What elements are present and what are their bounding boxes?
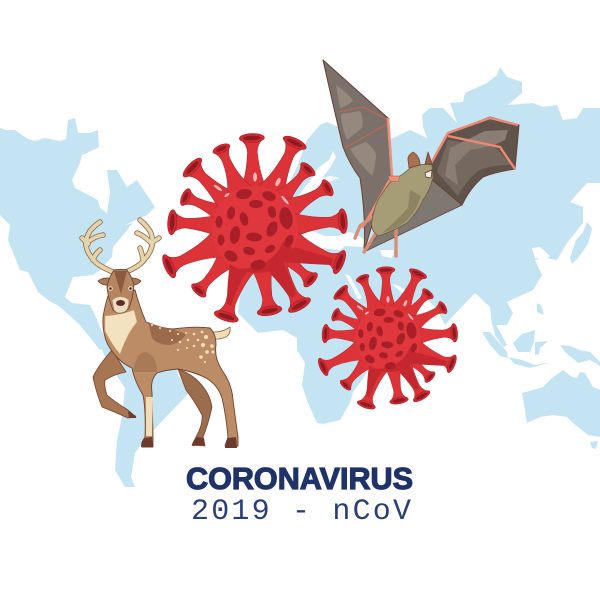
- bat: right wing bones: [430, 118, 518, 169]
- deer: shoulder shade: [133, 352, 157, 372]
- deer: spots: [151, 324, 214, 363]
- map: Red Sea: [345, 274, 362, 299]
- deer: right antler: [126, 220, 159, 272]
- deer: body: [103, 290, 238, 447]
- bat: left wing bones: [338, 107, 388, 148]
- deer: cream front shin: [146, 397, 153, 436]
- map: Mediterranean: [298, 230, 366, 250]
- map: Black Sea: [380, 250, 394, 258]
- map: Japan and Kuril islands: [570, 222, 592, 264]
- map: Malay peninsula: [491, 318, 507, 347]
- map: Baltic and Scandinavia inlet: [298, 151, 340, 197]
- bat: right wing lower membrane: [364, 172, 462, 252]
- bat: mouth: [425, 170, 432, 178]
- deer: cream chest bib: [105, 310, 137, 354]
- bat: hand: [388, 176, 400, 182]
- map: Yellow Sea: [532, 247, 550, 260]
- map: Borneo: [513, 330, 535, 352]
- deer: nose: [116, 300, 125, 306]
- deer: forehead stripe: [114, 271, 127, 294]
- world map: [0, 67, 600, 487]
- deer: ears: [98, 278, 141, 285]
- map: Java and lesser islands: [508, 357, 552, 368]
- bat: body: [372, 164, 433, 236]
- map: South America: [98, 335, 190, 487]
- title: CORONAVIRUS: CORONAVIRUS: [186, 462, 413, 496]
- bat: right wing: [430, 117, 519, 205]
- map: New Guinea: [560, 345, 600, 366]
- map: Eurasia and Africa: [238, 67, 600, 424]
- bat: far ear: [425, 152, 432, 164]
- bat: near ear: [408, 152, 420, 168]
- bat: left arm bone: [362, 118, 392, 228]
- bat: right wing light panel: [437, 140, 512, 196]
- bat: left wing light patches: [336, 85, 376, 176]
- deer: eyes: [109, 287, 132, 290]
- map: Philippines: [537, 303, 544, 315]
- deer: far back leg: [178, 369, 212, 446]
- map: North and Central America: [0, 118, 155, 350]
- deer: left antler: [82, 222, 113, 272]
- virus: large red coronavirus: [157, 131, 351, 327]
- bat: body shade: [382, 190, 421, 233]
- deer: [82, 220, 238, 448]
- map: Celebes: [535, 341, 548, 355]
- map: Sumatra: [482, 332, 508, 358]
- subtitle: 2019 - nCoV: 2019 - nCoV: [191, 495, 411, 529]
- deer: hooves: [128, 411, 237, 448]
- map: Australia: [522, 370, 600, 437]
- deer: head: [107, 270, 134, 313]
- deer: muzzle: [112, 296, 129, 313]
- bat: legs: [355, 217, 396, 256]
- bat: [323, 60, 519, 256]
- bat: left wing: [323, 60, 392, 252]
- map: Persian Gulf: [392, 284, 408, 293]
- map: Tasmania: [590, 441, 598, 449]
- virus: small red coronavirus: [314, 265, 460, 412]
- deer: bent front leg: [93, 350, 136, 418]
- deer: dark back saddle: [148, 322, 186, 345]
- bat: right wing highlight: [445, 130, 508, 185]
- deer: tail: [208, 327, 230, 339]
